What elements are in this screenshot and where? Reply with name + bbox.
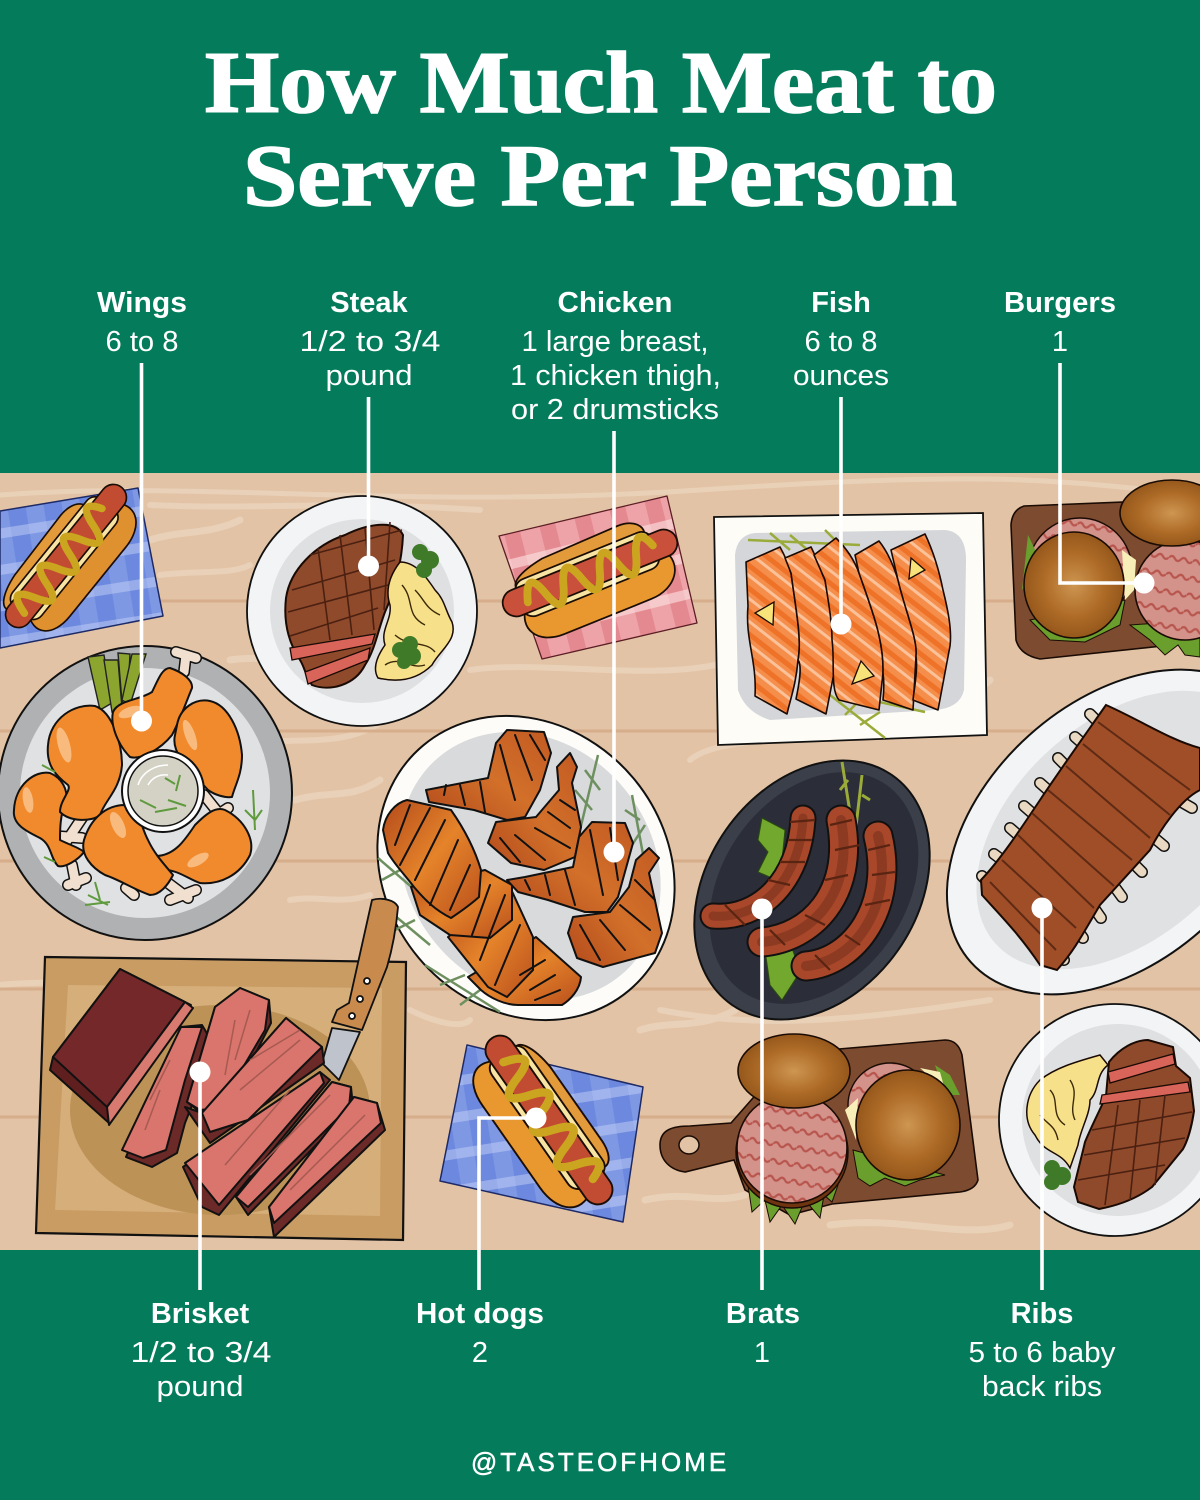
dill garnish xyxy=(748,530,925,738)
label: burgers: Burgers xyxy=(1004,287,1116,319)
wooden table band xyxy=(0,473,1200,1250)
label: chicken: Chicken xyxy=(558,287,672,319)
mashed potatoes xyxy=(376,562,453,680)
brats plate xyxy=(646,715,978,1065)
chicken plate xyxy=(316,655,736,1081)
label: wings: 6 to 8 xyxy=(106,326,178,358)
wing sauce highlights xyxy=(21,703,211,870)
bottom hot dog on blue napkin xyxy=(440,1020,643,1228)
label: steak xyxy=(300,287,440,392)
leader lines and dots xyxy=(131,363,1154,1290)
label: ribs: back ribs xyxy=(982,1371,1102,1403)
rosemary xyxy=(378,755,645,1012)
steak plate top xyxy=(247,496,477,726)
ribs platter xyxy=(884,605,1200,1059)
grilled chicken breasts xyxy=(383,800,581,1005)
label: ribs xyxy=(968,1298,1116,1403)
rib rack xyxy=(981,705,1200,970)
label: chicken xyxy=(510,287,721,426)
fish platter xyxy=(714,513,987,745)
label: burgers: 1 xyxy=(1052,326,1068,358)
label: ribs: Ribs xyxy=(1011,1298,1073,1330)
title: How Much Meat to xyxy=(205,35,997,132)
label: steak: pound xyxy=(326,360,412,392)
wings plate xyxy=(0,646,292,940)
label: fish: Fish xyxy=(811,287,871,319)
dark brisket end piece xyxy=(50,969,193,1125)
burger board bottom xyxy=(660,1034,978,1224)
brisket cutting board xyxy=(36,899,406,1240)
herb garnish xyxy=(42,765,262,905)
lemon wedges xyxy=(755,558,925,684)
orange wing pieces xyxy=(14,668,251,895)
top-left hot dog on blue napkin xyxy=(0,469,163,650)
label: wings xyxy=(97,287,187,358)
label: wings: Wings xyxy=(97,287,187,319)
rosemary xyxy=(840,762,870,835)
ranch dip cup xyxy=(122,750,204,832)
grill marks xyxy=(395,735,655,1000)
label: brisket: pound xyxy=(156,1371,244,1403)
knife xyxy=(322,899,398,1080)
salmon fillets xyxy=(746,534,951,714)
title xyxy=(205,35,997,225)
label: fish: 6 to 8 xyxy=(804,326,878,358)
parsley xyxy=(758,818,800,1000)
label: chicken: or 2 drumsticks xyxy=(511,394,719,426)
rib bones xyxy=(982,714,1192,960)
label: brats xyxy=(726,1298,800,1369)
burgers top right xyxy=(1011,480,1200,659)
label: hot dogs: 2 xyxy=(472,1337,488,1369)
lettuce xyxy=(748,1185,838,1224)
label: brisket: Brisket xyxy=(151,1298,250,1330)
label: brats: 1 xyxy=(754,1337,770,1369)
parsley xyxy=(392,544,439,669)
wing bones xyxy=(55,652,228,900)
celery sticks xyxy=(88,653,146,712)
label: chicken: 1 chicken thigh, xyxy=(510,360,721,392)
label: chicken: 1 large breast, xyxy=(522,326,708,358)
steak xyxy=(285,525,403,688)
label: fish: ounces xyxy=(793,360,889,392)
footer handle: @TASTEOFHOME xyxy=(471,1447,729,1477)
mashed potatoes xyxy=(1027,1055,1108,1168)
label: fish xyxy=(793,287,889,392)
title: Serve Per Person xyxy=(243,128,957,225)
steak plate bottom right xyxy=(999,1004,1200,1236)
grilled drumsticks xyxy=(426,730,662,967)
sausages xyxy=(713,818,882,966)
parsley xyxy=(1044,1160,1071,1190)
brisket slices xyxy=(122,988,385,1237)
label: brisket: 1/2 to 3/4 xyxy=(130,1337,272,1369)
label: burgers xyxy=(1004,287,1116,358)
label: hot dogs xyxy=(416,1298,544,1369)
label: brisket xyxy=(130,1298,272,1403)
label: steak: Steak xyxy=(330,287,409,319)
label: ribs: 5 to 6 baby xyxy=(968,1337,1116,1369)
label: steak: 1/2 to 3/4 xyxy=(300,326,440,358)
label: brats: Brats xyxy=(726,1298,800,1330)
steak xyxy=(1074,1040,1194,1209)
hot dog on red gingham napkin xyxy=(491,496,697,659)
label: hot dogs: Hot dogs xyxy=(416,1298,544,1330)
